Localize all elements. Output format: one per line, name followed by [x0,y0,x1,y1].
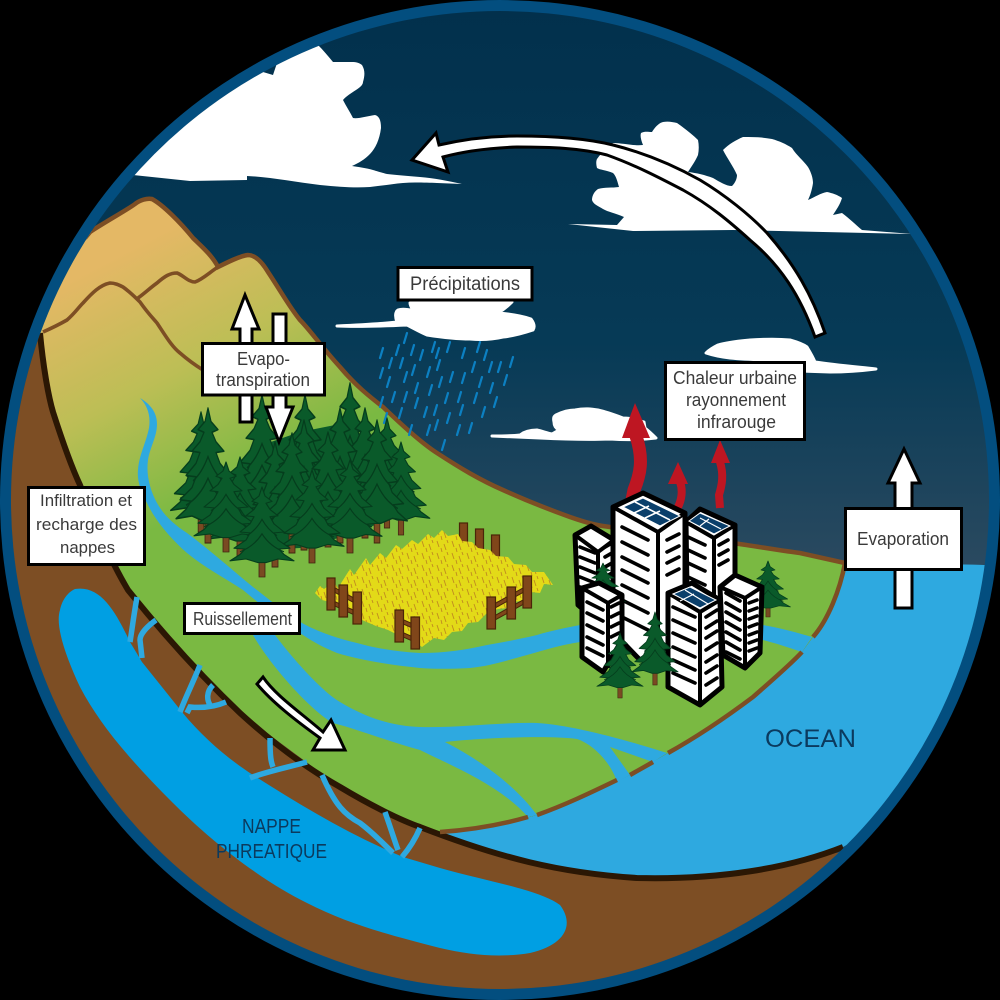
evapotranspiration arrow up [232,295,259,422]
wheat field [315,530,553,647]
label: Précipitations [398,268,532,300]
fence: left [327,578,362,624]
groundwater aquifer [59,589,567,955]
evapotranspiration arrow down [266,314,293,442]
building: front left [582,583,622,672]
red arrow 3 [711,440,730,508]
label: Précipitations: Précipitations [410,274,520,295]
soil [11,334,839,989]
tree: city front [597,633,643,698]
label: Chaleur urbaine: infrarouge [697,412,776,432]
coast line [440,563,845,832]
building: back left [572,524,610,610]
cloud: top left [100,45,462,187]
big air circulation arrow [412,133,825,337]
label: Chaleur urbaine [666,362,804,440]
label: Evapo-transpiration: transpiration [216,370,310,390]
building: front tower [668,583,722,705]
building: right small [720,575,762,668]
label: OCEAN: OCEAN [765,725,856,753]
label: Infiltration: nappes [60,538,115,557]
label: Evaporation: Evaporation [857,529,949,549]
label: Ruissellement: Ruissellement [193,609,292,629]
label: Ruissellement [184,604,300,634]
cloud: upper city [706,339,876,372]
tree: city centre [632,612,678,685]
label: Chaleur urbaine: Chaleur urbaine [673,368,797,388]
label: Infiltration: recharge des [36,515,137,534]
ground edge [40,333,843,878]
cloud: precipitation [337,302,534,340]
second river with delta [253,635,667,817]
city [575,403,790,705]
label: Evaporation [846,508,962,570]
label: NAPPE PHREATIQUE: PHREATIQUE [216,841,327,863]
building: back right [686,509,735,610]
land and mountains [0,199,845,832]
fence: bottom [395,610,420,649]
second ridge [138,267,218,298]
evaporation arrow [888,449,920,608]
rivers [138,398,812,817]
label: Chaleur urbaine: rayonnement [686,390,786,410]
label: Evapo-transpiration: Evapo- [237,349,290,369]
main river [138,398,812,669]
runoff arrow [257,677,345,750]
red arrow 1 [622,403,650,500]
label: NAPPE PHREATIQUE: NAPPE [242,816,301,838]
building: main tower [613,493,685,660]
back fence posts [460,523,500,562]
label: NAPPE PHREATIQUE [216,816,327,863]
mountain outline [85,199,845,563]
inner ridge [43,283,203,370]
infiltration streams [130,597,420,857]
label: Evapo-transpiration [202,344,324,395]
cloud: middle [492,409,656,440]
forest [171,383,430,577]
ocean [420,563,1000,878]
label: Infiltration: Infiltration et [40,491,132,510]
rain [380,333,513,450]
label: Infiltration [28,488,144,564]
tree: behind buildings [591,562,626,602]
tree: right [756,560,791,618]
fence: right [487,576,532,629]
cloud: top right [568,122,912,234]
red arrow 2 [668,462,688,509]
